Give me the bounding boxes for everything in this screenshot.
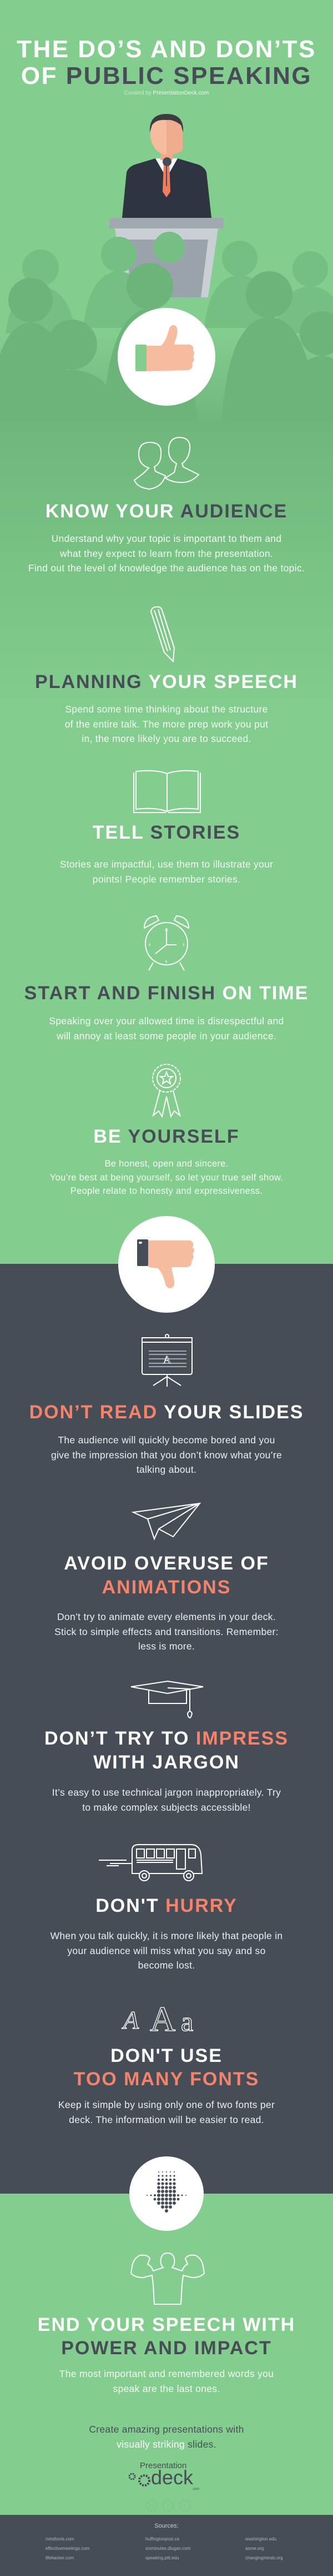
speaker <box>122 114 211 218</box>
text: know your audience <box>28 533 305 574</box>
text: be yourself: You’re best at being yourself, so let your true self show. <box>50 1173 283 1183</box>
icons: creative commons <box>146 2500 190 2511</box>
icon: alarm clock: 3 <box>183 944 185 947</box>
icon: alarm clock: 12 <box>165 929 169 933</box>
heading line 2: animations: ANIMATIONS <box>102 1577 231 1598</box>
text: slides: The audience will quickly become bored and you <box>58 1434 275 1446</box>
crowd back row <box>6 232 333 333</box>
text: tell stories <box>60 859 273 885</box>
icon: fonts: a <box>181 2006 193 2037</box>
text: hurry: When you talk quickly, it is more likely that people in <box>51 1930 282 1941</box>
title line 2: OF PUBLIC SPEAKING <box>21 62 312 89</box>
text: animations <box>54 1611 279 1652</box>
text: animations: Don’t try to animate every elements in your deck. <box>57 1611 276 1622</box>
heading: be yourself: BE YOURSELF <box>93 1126 240 1147</box>
sources column 2: speaking.pitt.edu <box>145 2555 179 2560</box>
icon: fonts: A <box>122 2006 139 2034</box>
text: fonts <box>58 2099 275 2125</box>
sources column 2: huffingtonpost.ca <box>145 2537 179 2542</box>
sources column 3: washington.edu <box>245 2537 276 2542</box>
sources column 1: mindtools.com <box>46 2537 74 2542</box>
footer heading: sources: Sources: <box>154 2523 179 2529</box>
heading: don't hurry: DON'T HURRY <box>95 1895 238 1916</box>
heading: end your speech with: END YOUR SPEECH WITH <box>38 2314 295 2335</box>
heading: don't try to impress: DON’T TRY TO IMPRESS <box>44 1728 289 1749</box>
icons: creative commons: = <box>184 2503 186 2508</box>
text: on time: will annoy at least some people in your audience. <box>57 1030 276 1042</box>
background: green top <box>0 0 333 1264</box>
heading: avoid overuse of animations: AVOID OVERUSE OF <box>64 1553 269 1574</box>
illustration: speaker, podium and crowd <box>0 114 333 403</box>
text: planning: of the entire talk. The more prep work you put <box>65 718 268 729</box>
sources column 1: effectivemeetings.com <box>46 2546 89 2551</box>
text: slides: give the impression that you don’t know what you’re <box>51 1449 282 1461</box>
text: be yourself: Be honest, open and sincere. <box>104 1159 229 1169</box>
icon: alarm clock: 9 <box>149 944 151 947</box>
background: dark section <box>0 1264 333 2194</box>
heading: tell stories: TELL STORIES <box>93 822 240 843</box>
icons: creative commons: cc <box>149 2503 154 2508</box>
icon: fonts <box>121 1999 193 2039</box>
text: fonts: deck. The information will be easier to read. <box>69 2114 264 2125</box>
text: planning: Spend some time thinking about the structure <box>65 704 268 715</box>
text: animations: Stick to simple effects and transitions. Remember: <box>54 1626 279 1637</box>
text: on time: Speaking over your allowed time is disrespectful and <box>49 1015 284 1027</box>
crowd front row <box>0 263 333 422</box>
sources column 1 <box>46 2537 89 2560</box>
text: slides: talking about. <box>137 1464 196 1475</box>
icon: award ribbon <box>152 1064 181 1118</box>
text: animations: less is more. <box>138 1641 195 1652</box>
heading: know your audience: KNOW YOUR AUDIENCE <box>46 501 287 522</box>
heading line 2: with jargon: WITH JARGON <box>93 1752 240 1773</box>
icon: slide easel: A <box>163 1354 171 1366</box>
icon: thumbs down circle <box>118 1216 215 1313</box>
text: know your audience: Understand why your topic is important to them and <box>52 533 281 544</box>
text: on time <box>49 1015 284 1042</box>
podium <box>109 218 224 297</box>
text: hurry: become lost. <box>138 1960 195 1971</box>
text: know your audience: what they expect to learn from the presentation. <box>60 548 273 559</box>
text: end <box>59 2368 274 2394</box>
text: tell stories: Stories are impactful, use them to illustrate your <box>60 859 273 870</box>
heading: don't read your slides: DON’T READ YOUR SLIDES <box>29 1402 304 1423</box>
heading line 2: power and impact: POWER AND IMPACT <box>61 2338 272 2359</box>
text: call to action: visually striking slides. <box>117 2439 216 2450</box>
sources column 2: sixminutes.dlugan.com <box>145 2546 190 2551</box>
icon: audience (two people) <box>133 437 200 490</box>
title: THE DO’S AND DON’TS <box>17 36 316 63</box>
text: jargon: It’s easy to use technical jargon inappropriately. Try <box>52 1787 281 1798</box>
sources column 1: lifehacker.com <box>46 2555 74 2560</box>
heading: planning your speech: PLANNING YOUR SPEECH <box>35 671 298 692</box>
logo: presentation deck: .com <box>192 2488 199 2491</box>
icon: alarm clock: 6 <box>165 960 168 964</box>
heading line 2: too many fonts: TOO MANY FONTS <box>74 2069 259 2090</box>
icon: graduation cap <box>131 1681 203 1718</box>
sources column 3: changingminds.org <box>245 2555 283 2560</box>
icon: muscle man <box>130 2253 205 2305</box>
text: end: speak are the last ones. <box>113 2383 220 2394</box>
icon: pencil <box>150 606 175 662</box>
icon: bus <box>99 1844 203 1881</box>
text: planning <box>65 704 268 744</box>
icon: fonts: A <box>150 1999 175 2039</box>
text: know your audience: Find out the level of knowledge the audience has on the topic. <box>28 562 305 574</box>
sources column 3 <box>245 2537 283 2560</box>
icon: paper plane <box>131 1503 201 1541</box>
heading: start and finish on time: START AND FINISH ON TIME <box>24 983 309 1004</box>
text: jargon <box>52 1787 281 1813</box>
icon: book <box>133 770 201 813</box>
icon: dotted arrow circle <box>129 2156 204 2231</box>
text: call to action <box>89 2424 244 2450</box>
sources column 2 <box>145 2537 190 2560</box>
text: end: The most important and remembered words you <box>59 2368 274 2379</box>
text: hurry <box>50 1930 282 1971</box>
footer <box>0 2515 333 2576</box>
sources column 3: asme.org <box>245 2546 264 2551</box>
text: slides <box>51 1434 282 1475</box>
logo: presentation deck: deck <box>151 2466 193 2489</box>
logo: presentation deck <box>127 2461 210 2494</box>
icon: slide easel <box>142 1334 193 1387</box>
icon: thumbs up circle <box>118 308 215 406</box>
text: fonts: Keep it simple by using only one of two fonts per <box>58 2099 275 2110</box>
text: tell stories: points! People remember stories. <box>93 874 240 885</box>
text: planning: in, the more likely you are to succeed. <box>82 733 251 744</box>
icon: alarm clock <box>144 915 189 970</box>
text: jargon: to make complex subjects accessible! <box>82 1802 251 1813</box>
subtitle: Curated by PresentationDeck.com <box>124 90 209 96</box>
background: green bottom <box>0 2194 333 2515</box>
text: call to action: Create amazing presentations with <box>89 2424 244 2435</box>
icons: creative commons: i <box>168 2503 169 2508</box>
icon: gears <box>128 2472 152 2488</box>
heading: don't use too many fonts: DON'T USE <box>110 2045 223 2066</box>
text: hurry: your audience will miss what you say and so <box>67 1945 266 1956</box>
logo: presentation deck: Presentation <box>140 2461 186 2470</box>
text: be yourself: People relate to honesty and expressiveness. <box>70 1186 263 1196</box>
text: be yourself <box>50 1159 283 1196</box>
